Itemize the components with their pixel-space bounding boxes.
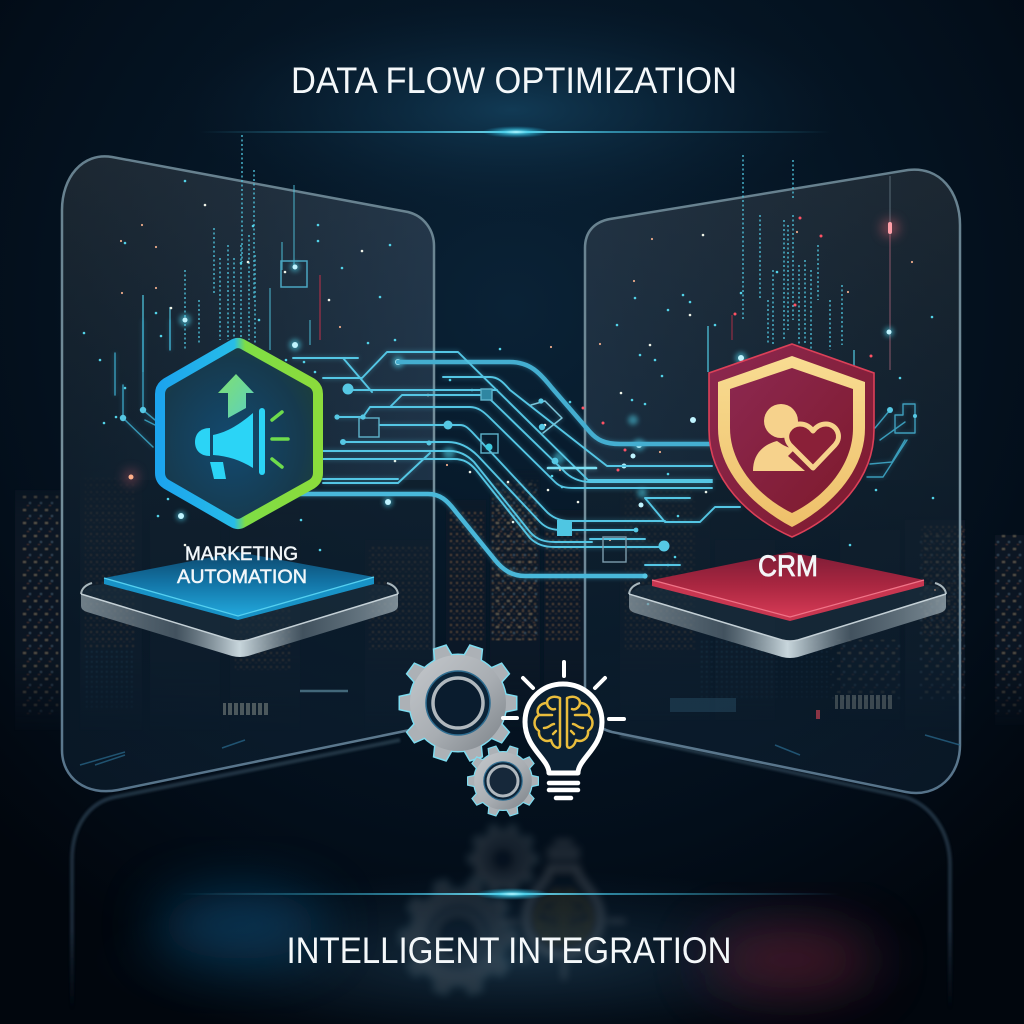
- label: marketing automation: AUTOMATION: [177, 566, 307, 588]
- thick upper trace: [398, 362, 712, 444]
- panel: left glass: [62, 156, 434, 791]
- circuit glow: [115, 320, 915, 576]
- label: marketing automation: MARKETING: [185, 543, 298, 565]
- icon: person: [753, 404, 805, 471]
- glass base: [81, 565, 398, 657]
- bottom divider: [180, 888, 840, 900]
- floor glow: red: [705, 930, 875, 990]
- icon: CRM shield: [709, 344, 874, 537]
- circuit nodes and boxes: [120, 384, 917, 579]
- left platform: [81, 552, 398, 657]
- window reflections: [80, 691, 348, 765]
- title: DATA FLOW OPTIMIZATION: [291, 60, 737, 101]
- right of shield: [867, 410, 907, 477]
- small square: [281, 261, 307, 287]
- icon: hexagon marketing badge: [160, 343, 318, 524]
- floor glow behind the caption: [92, 870, 932, 1024]
- icon: megaphone: [195, 408, 265, 479]
- icon: heart: [787, 424, 838, 468]
- panel: right glass: [585, 170, 960, 793]
- label: CRM: CRM: [758, 550, 818, 583]
- diamond connector: [531, 401, 562, 433]
- city skyline: [15, 470, 1024, 730]
- icon: growth arrow: [218, 374, 254, 418]
- top divider: [200, 126, 830, 138]
- floor reflection of the gears and bulb: [400, 824, 624, 995]
- floor reflection of the panels: [72, 735, 950, 1010]
- glowing nodes: [125, 220, 898, 521]
- data rain: right panel: [708, 155, 890, 372]
- data rain: left panel: [143, 135, 320, 372]
- thick lower trace: [293, 494, 645, 576]
- red plate: [652, 580, 924, 621]
- fat highlights: [548, 467, 596, 469]
- thin traces: [293, 352, 740, 565]
- label: marketing automation: [177, 543, 307, 588]
- right platform: [629, 552, 946, 658]
- window reflections: [670, 695, 960, 755]
- circuit: connections between the panels: [115, 320, 915, 576]
- left of hexagon: [115, 320, 170, 447]
- floor glow: blue: [155, 891, 325, 959]
- closing caption: INTELLIGENT INTEGRATION: [286, 930, 732, 971]
- icon group: gears and AI lightbulb: [400, 645, 624, 816]
- blue plate: [104, 577, 374, 620]
- icon: sound waves: [272, 412, 288, 467]
- glass base: [629, 565, 946, 658]
- particle dots: [84, 181, 935, 604]
